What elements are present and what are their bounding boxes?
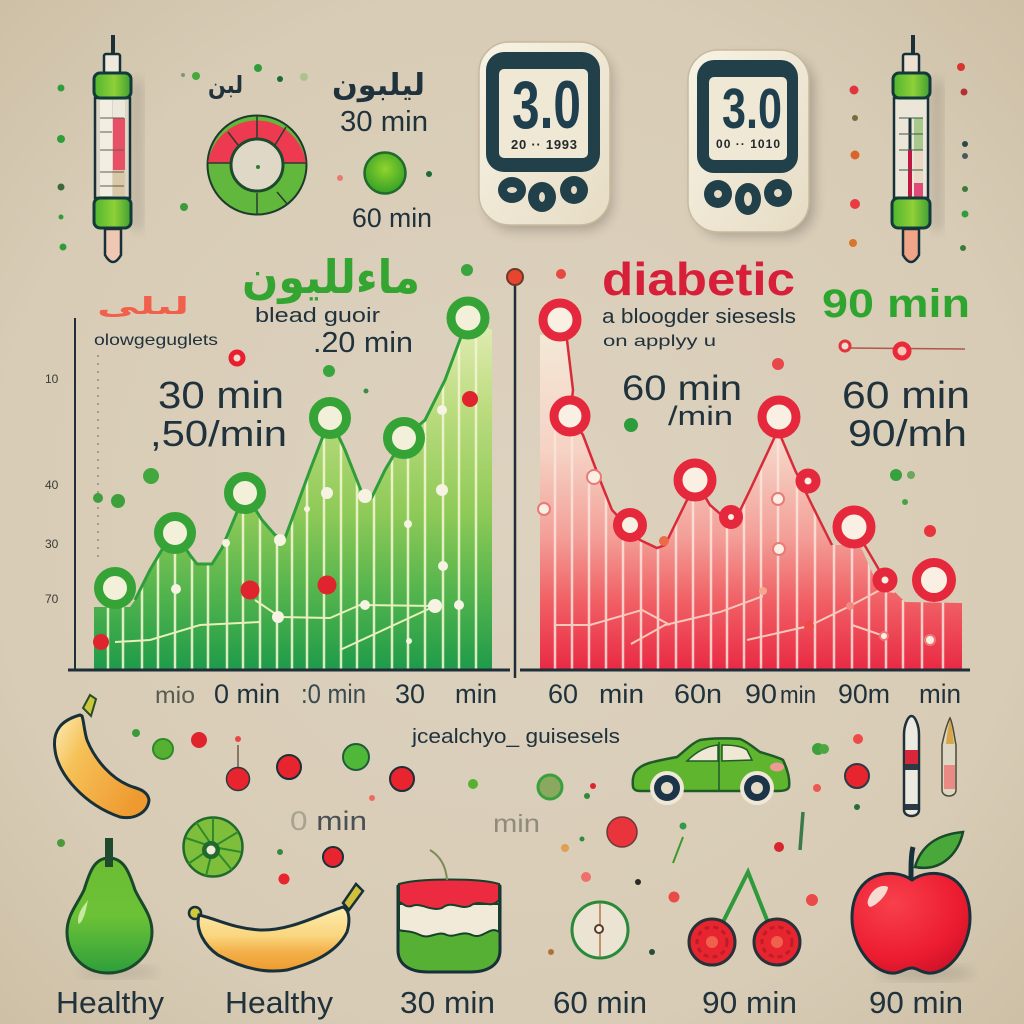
- x axis labels: 90m: [838, 679, 890, 709]
- labels: middle: [290, 806, 540, 838]
- x axis labels: [155, 679, 961, 709]
- x axis labels: min: [780, 682, 816, 709]
- heading: healthy: [94, 251, 420, 359]
- heading: top centre-left labels: 60 min: [352, 203, 432, 233]
- markers: [543, 303, 952, 598]
- callout: diabetic values: 90/mh: [848, 413, 967, 454]
- heading: healthy snacks: jcealchyo_ ɡuisesels: [411, 726, 620, 748]
- heading: healthy: ماءلليون: [242, 251, 420, 304]
- icon: bottom banana: [189, 884, 363, 971]
- callout: diabetic values: 60 min: [622, 369, 742, 408]
- icon: cake: [398, 850, 500, 972]
- y axis labels: [45, 372, 59, 606]
- heading: top centre-left labels: [208, 69, 432, 233]
- x axis labels: :0 min: [301, 679, 366, 709]
- white bars: [555, 430, 943, 669]
- callout: healthy values: ,50/min: [150, 413, 287, 454]
- callout: diabetic values: /min: [668, 401, 733, 431]
- icon: vials: [904, 716, 956, 816]
- x axis labels: 30: [395, 679, 425, 709]
- curve line: [567, 340, 885, 580]
- heading: diabetic: on applyy u: [603, 333, 716, 350]
- bottom labels: 90 min: [702, 985, 797, 1020]
- markers: [98, 301, 485, 604]
- annotation: red arrow and dots: [93, 341, 965, 537]
- heading: top centre-left labels: لبن: [208, 72, 243, 99]
- icon: glucose meter left: 3.0: [512, 67, 581, 143]
- heading: healthy: .20 min: [313, 327, 413, 359]
- curve line: [135, 318, 468, 600]
- x axis labels: min: [919, 679, 961, 709]
- icon: kiwi: [184, 818, 242, 876]
- icon: apple: [852, 832, 973, 979]
- small points: [171, 405, 464, 644]
- scattered top dots: [57, 63, 968, 279]
- x axis labels: 60: [548, 679, 578, 709]
- callout: diabetic values: [622, 369, 970, 454]
- icon: glucose meter left: [479, 42, 612, 230]
- icon: top left banana: [54, 695, 149, 818]
- scattered middle dots: [57, 729, 869, 955]
- heading: healthy: لىلى: [97, 293, 189, 320]
- icon: pear: [67, 838, 158, 977]
- icon: glucose meter right: 00 ·· 1010: [716, 137, 780, 151]
- y axis labels: 10: [45, 372, 59, 386]
- bottom labels: Healthy: [225, 985, 334, 1020]
- marker: centre pin: [507, 269, 523, 285]
- green area: [94, 318, 492, 669]
- heading: top centre-left labels: ليلبون: [332, 69, 425, 102]
- small points: [538, 470, 935, 645]
- icon: glucose meter left: 20 ·· 1993: [511, 137, 577, 152]
- x axis labels: 60n: [674, 679, 722, 709]
- callout: healthy values: 30 min: [158, 375, 284, 417]
- white bars: [108, 320, 476, 669]
- heading: diabetic: [602, 253, 970, 350]
- x axis labels: 90: [745, 679, 777, 709]
- x axis labels: 0 min: [214, 679, 280, 709]
- labels: middle: 0 min: [290, 806, 367, 836]
- heading: diabetic: diabetic: [602, 253, 795, 305]
- trend lines: [115, 600, 435, 650]
- labels: middle: min: [493, 810, 540, 838]
- heading: healthy: blead guoir: [255, 305, 380, 327]
- chart axes: [68, 285, 970, 678]
- bottom labels: Healthy: [56, 985, 165, 1020]
- y axis labels: 30: [45, 537, 59, 551]
- x axis labels: min: [455, 679, 497, 709]
- icon: green ball: [364, 152, 406, 194]
- icon: cherries: [689, 872, 800, 965]
- x axis labels: mio: [155, 682, 195, 708]
- bottom labels: 60 min: [553, 985, 647, 1020]
- callout: diabetic values: 60 min: [842, 375, 970, 417]
- callout: healthy values: [150, 375, 287, 454]
- heading: top centre-left labels: 30 min: [340, 106, 428, 138]
- heading: diabetic: 90 min: [822, 282, 970, 326]
- icon: car: [633, 738, 789, 805]
- red area: [540, 335, 962, 669]
- icon: glucose meter right: 3.0: [722, 77, 782, 141]
- icon: donut gauge: [208, 115, 306, 215]
- icon: clock: [572, 902, 628, 958]
- panel: healthy chart: [93, 301, 492, 669]
- panel: diabetic chart: [538, 303, 962, 669]
- bottom labels: 30 min: [400, 985, 495, 1020]
- bottom labels: [56, 985, 963, 1020]
- y axis labels: 40: [45, 478, 59, 492]
- y axis labels: 70: [45, 592, 59, 606]
- heading: healthy: olowgeguglets: [94, 332, 218, 349]
- icon: glucose meter right: [688, 50, 814, 236]
- icon: right thermometer: [892, 35, 942, 262]
- trend lines: [555, 590, 895, 644]
- icon: left thermometer: [94, 35, 142, 262]
- bottom labels: 90 min: [869, 985, 963, 1020]
- x axis labels: min: [599, 679, 644, 709]
- heading: diabetic: a bloogder siesesls: [602, 306, 796, 328]
